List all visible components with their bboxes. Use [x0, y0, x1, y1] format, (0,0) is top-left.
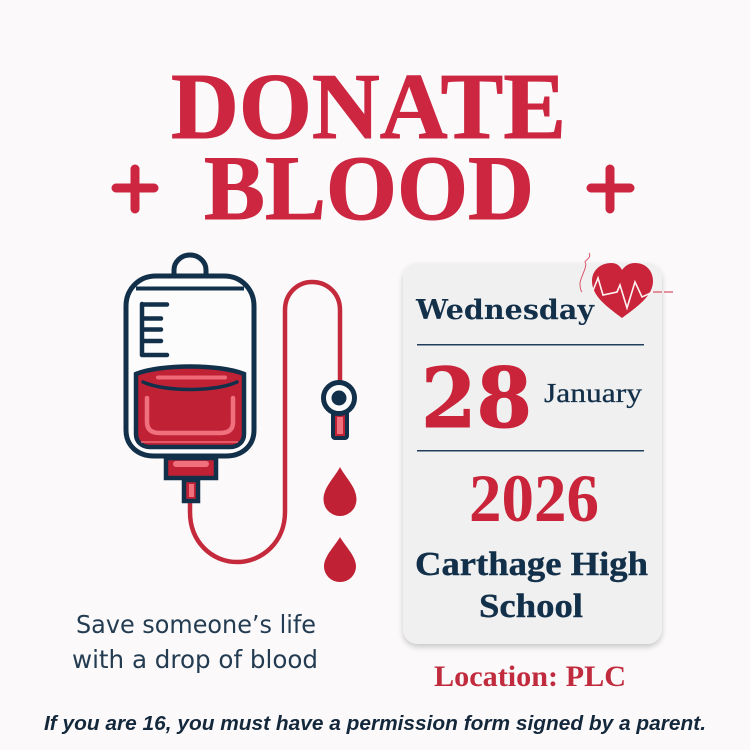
- day number: 28: [421, 351, 532, 447]
- weekday: Wednesday: [415, 294, 595, 326]
- icon: blood bag with tube: [126, 255, 354, 562]
- volume scale: [142, 304, 167, 355]
- title: donate blood: DONATE: [171, 55, 566, 159]
- permission note: If you are 16, you must have a permission form signed by a parent.: [44, 713, 706, 735]
- icon: heart with pulse: [580, 253, 673, 318]
- school name: [415, 546, 648, 625]
- tagline: Save someone’s life: [76, 610, 316, 639]
- icon: left plus: [116, 169, 154, 209]
- location: Location: PLC: [434, 660, 626, 693]
- school name: Carthage High: [415, 546, 648, 583]
- tagline: with a drop of blood: [72, 645, 318, 674]
- icon: right plus: [591, 169, 630, 209]
- year: 2026: [469, 460, 599, 536]
- school name: School: [479, 588, 583, 625]
- panel: date card: [403, 263, 662, 644]
- icon: lower blood drop: [324, 537, 356, 582]
- title: donate blood: [171, 55, 566, 239]
- bag hook: [174, 255, 206, 275]
- tagline: [72, 610, 318, 674]
- blood in bag: [136, 366, 244, 447]
- bag connector: [166, 458, 216, 478]
- tube: [190, 282, 340, 562]
- tube clamp: [325, 406, 354, 437]
- bag body: [126, 276, 254, 456]
- divider: [417, 344, 644, 346]
- divider: [417, 450, 644, 452]
- month: January: [544, 378, 643, 408]
- icon: upper blood drop: [324, 467, 356, 516]
- title: donate blood: BLOOD: [204, 137, 534, 239]
